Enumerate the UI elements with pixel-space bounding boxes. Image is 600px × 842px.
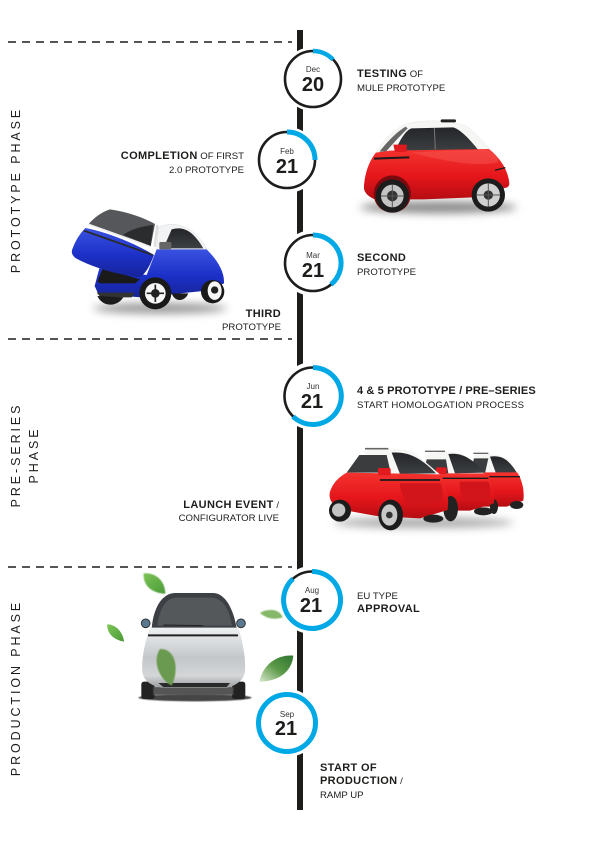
milestone: Aug 21: 21 xyxy=(300,595,322,617)
text: start of production, ramp up: PRODUCTION / xyxy=(320,775,403,787)
milestone: Feb 21: 21 xyxy=(276,156,298,178)
text: testing of mule prototype xyxy=(357,68,445,94)
front car xyxy=(329,448,448,530)
text: third prototype xyxy=(222,308,281,333)
leaf: left xyxy=(107,624,124,642)
text: EU type approval: EU TYPE xyxy=(357,591,398,602)
milestone: Dec 20 xyxy=(281,47,345,111)
text: completion of first 2.0 prototype xyxy=(121,150,244,176)
milestone: Sep 21: 21 xyxy=(275,718,297,740)
second car xyxy=(423,451,494,521)
milestone: Mar 21 xyxy=(280,230,346,296)
text: 4 and 5 prototype, pre-series xyxy=(357,385,536,411)
phase label: prototype: PROTOTYPE PHASE xyxy=(9,107,23,273)
milestone: Mar 21: 21 xyxy=(302,260,324,282)
milestone: Feb 21: Feb xyxy=(280,147,294,156)
text: third prototype: THIRD xyxy=(246,308,281,320)
text: 4 and 5 prototype, pre-series: 4 & 5 PROTOTYPE / PRE–SERIES xyxy=(357,385,536,397)
text: EU type approval xyxy=(357,591,420,615)
text: testing of mule prototype: MULE PROTOTYPE xyxy=(357,83,445,94)
milestone: Jun 21: 21 xyxy=(301,391,323,413)
phase label: pre-series xyxy=(9,403,41,507)
text: launch event: CONFIGURATOR LIVE xyxy=(179,513,279,524)
text: second prototype: PROTOTYPE xyxy=(357,267,416,278)
text: completion of first 2.0 prototype: 2.0 PROTOTYPE xyxy=(169,165,244,176)
text: start of production, ramp up: START OF xyxy=(320,762,377,774)
milestone: Dec 20: 20 xyxy=(302,74,324,96)
leaf: on car xyxy=(157,649,176,686)
milestone: Dec 20: Dec xyxy=(306,65,320,74)
phase label: production: PRODUCTION PHASE xyxy=(9,600,23,776)
text: second prototype: SECOND xyxy=(357,252,406,264)
car: silver front view xyxy=(138,593,252,701)
milestone: Jun 21: Jun xyxy=(307,382,319,391)
text: launch event xyxy=(179,499,279,524)
dashed divider: top of prototype phase xyxy=(8,41,292,43)
car: red side view xyxy=(360,119,517,213)
dashed divider: top of production phase xyxy=(8,566,292,568)
car: blue with open front door xyxy=(72,209,227,314)
text: second prototype xyxy=(357,252,416,278)
leaf: top xyxy=(144,573,165,594)
text: completion of first 2.0 prototype: COMPLETION OF FIRST xyxy=(121,150,244,162)
third car xyxy=(470,453,524,514)
milestone: Aug 21 xyxy=(278,566,346,634)
milestone: Mar 21: Mar xyxy=(306,251,320,260)
milestone: Jun 21 xyxy=(279,362,347,430)
text: launch event: LAUNCH EVENT / xyxy=(183,499,279,511)
milestone: Aug 21: Aug xyxy=(305,586,319,595)
milestone: Feb 21 xyxy=(254,127,320,193)
text: start of production, ramp up: RAMP UP xyxy=(320,790,364,801)
car: three red cars in a row xyxy=(329,448,524,530)
text: testing of mule prototype: TESTING OF xyxy=(357,68,423,80)
phase label: pre-series: PHASE xyxy=(27,427,41,483)
phase label: pre-series: PRE-SERIES xyxy=(9,403,23,507)
leaf: right upper xyxy=(260,610,283,619)
text: start of production, ramp up xyxy=(320,762,403,801)
text: 4 and 5 prototype, pre-series: START HOMOLOGATION PROCESS xyxy=(357,400,524,411)
timeline spine xyxy=(297,30,303,810)
text: third prototype: PROTOTYPE xyxy=(222,322,281,333)
dashed divider: top of pre-series phase xyxy=(8,338,292,340)
milestone: Sep 21: Sep xyxy=(280,710,295,719)
text: EU type approval: APPROVAL xyxy=(357,603,420,615)
milestone: Sep 21 xyxy=(253,689,321,757)
leaf: right lower xyxy=(259,656,293,682)
